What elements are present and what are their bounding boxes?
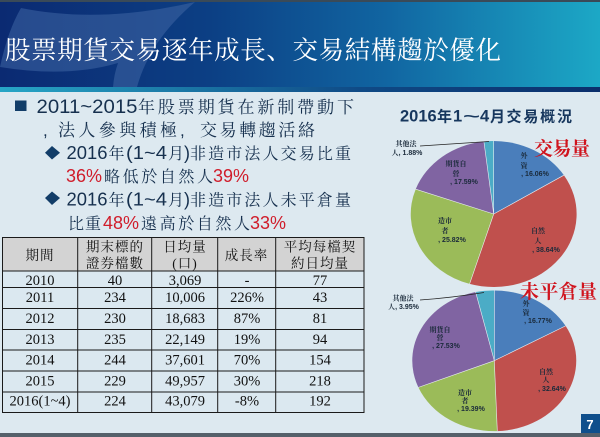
table rows: 18,683 (165, 311, 205, 327)
pie chart: open interest: 造市 (458, 388, 472, 397)
table rows: 2012 (26, 311, 54, 327)
icon: diamond bullet (45, 192, 60, 205)
bullet list (15, 97, 354, 233)
pie chart: trading volume: 人 (534, 237, 542, 245)
pie chart: trading volume: 外 (520, 151, 528, 160)
pie chart: open interest: 期貨自 (430, 325, 450, 334)
table rows: 49,957 (165, 374, 205, 390)
table rows (9, 273, 332, 410)
table rows: 77 (313, 273, 327, 289)
pie chart: trading volume: , 38.64% (532, 247, 561, 254)
sub bullet: open interest share: 2016 (66, 190, 108, 210)
table rows: - (245, 273, 250, 289)
pie chart: open interest: 自然 (539, 367, 554, 376)
footer bar (0, 433, 600, 437)
pie chart: open interest: 外 (522, 299, 530, 308)
chart title: 4 (480, 108, 490, 126)
pie chart: open interest: 者 (462, 396, 468, 405)
pie chart: trading volume: 人, 1.88% (392, 149, 423, 157)
chart title: 1 (453, 108, 462, 126)
sub bullet: open interest share: 48% (103, 212, 139, 233)
chart title (400, 108, 572, 126)
pie chart: open interest: 其他法 (392, 294, 414, 302)
pie chart: open interest: , 27.53% (432, 343, 461, 350)
sub bullet: open interest share: 年 (108, 190, 125, 210)
pie chart: trading volume (392, 139, 577, 287)
table rows: 235 (104, 332, 126, 348)
table rows: 2014 (26, 352, 55, 368)
table rows: 94 (313, 332, 328, 348)
pie chart: open interest: 人 (542, 376, 550, 384)
table rows: 43,079 (165, 394, 205, 410)
sub bullet: open interest share: 比重 (68, 215, 101, 233)
pie chart: trading volume: , 25.82% (438, 237, 467, 244)
pie chart: trading volume: 其他法 (396, 139, 417, 148)
chart title: 年 (437, 108, 452, 126)
table rows: 229 (104, 374, 126, 390)
page number (581, 414, 600, 433)
sub bullet: trading share: 2016 (66, 143, 108, 163)
table rows: 30% (234, 374, 260, 390)
table rows: 230 (104, 311, 126, 327)
table header: 期末標的 (86, 238, 144, 254)
table rows: 22,149 (165, 332, 205, 348)
label: open interest: 未平倉量 (520, 280, 597, 303)
table rows: 19% (234, 332, 260, 348)
sub bullet: trading share: 非造市法人交易比重 (190, 145, 351, 163)
table rows: 154 (309, 352, 332, 368)
table rows: 37,601 (165, 352, 205, 368)
sub bullet: open interest share (66, 190, 351, 233)
table header: 平均每檔契 (284, 238, 356, 254)
sub bullet: open interest share: 月 (168, 192, 184, 210)
icon: diamond bullet (45, 146, 60, 160)
sub bullet: open interest share: 非造市法人未平倉量 (190, 192, 351, 210)
table rows: 2011 (26, 290, 54, 306)
sub bullet: trading share (66, 143, 351, 186)
chart title: 2016 (400, 108, 437, 126)
sub bullet: trading share: 月 (168, 145, 184, 163)
pie chart: trading volume: , 16.06% (521, 171, 550, 178)
table rows: -8% (235, 394, 259, 410)
table rows: 218 (309, 374, 331, 390)
table header: 約日均量 (291, 256, 349, 271)
bullet text: main point: 年股票期貨在新制帶動下 (138, 97, 354, 117)
header banner (0, 0, 600, 92)
icon: square bullet (15, 100, 26, 111)
chart title: ~ (463, 108, 480, 126)
sub bullet: open interest share: ) (184, 190, 190, 210)
table rows: 234 (104, 290, 127, 306)
table rows: 2016(1~4) (9, 394, 71, 410)
data table (2, 237, 364, 412)
table header: 期間 (26, 248, 54, 263)
title: 股票期貨交易逐年成長、交易結構趨於優化 (5, 36, 501, 65)
table rows: 226% (230, 290, 264, 306)
table header: 成長率 (225, 247, 268, 263)
bullet text: main point: 2011~2015 (36, 97, 138, 118)
pie chart: trading volume: 者 (442, 226, 448, 235)
table rows: 81 (313, 311, 327, 327)
sub bullet: open interest share: 遠高於自然人 (141, 214, 250, 233)
sub bullet: trading share: ) (184, 143, 190, 163)
pie chart: trading volume: , 17.59% (450, 179, 479, 186)
bullet text: main point: , (43, 121, 48, 140)
pie chart: trading volume: 營 (452, 169, 460, 178)
sub bullet: open interest share: (1~4 (126, 190, 167, 210)
table rows: 192 (309, 394, 331, 410)
table rows: 87% (234, 311, 260, 327)
sub bullet: trading share: (1~4 (126, 143, 167, 163)
bullet text: main point (36, 97, 354, 140)
pie chart: trading volume: 自然 (531, 226, 546, 235)
chart title: 交易概況 (506, 108, 572, 126)
pie chart: open interest: 營 (436, 333, 444, 342)
pie chart: open interest: , 19.39% (457, 406, 486, 413)
bullet text: main point: , (180, 121, 185, 140)
page number: 7 (586, 417, 594, 432)
sub bullet: trading share: 年 (108, 144, 125, 163)
table header (26, 238, 356, 271)
table rows: 2015 (26, 374, 54, 390)
bullet text: main point: 法人參與積極 (58, 120, 177, 140)
sub bullet: trading share: 39% (213, 165, 249, 186)
pie chart: open interest: 人, 3.95% (388, 303, 420, 311)
label: trading volume: 交易量 (534, 138, 590, 160)
pie chart: open interest (388, 290, 576, 431)
table rows: 2010 (26, 273, 54, 289)
table rows: 244 (104, 352, 127, 368)
table rows: 10,006 (165, 290, 205, 306)
chart title: 月 (490, 108, 505, 126)
table rows: 2013 (26, 332, 54, 348)
table header: 證券檔數 (86, 255, 144, 271)
table rows: 224 (104, 394, 127, 410)
pie chart: trading volume: 資 (520, 161, 528, 170)
table rows: 40 (108, 273, 122, 289)
pie chart: trading volume: 期貨自 (446, 159, 466, 168)
pie chart: open interest: 資 (522, 308, 530, 317)
table rows: 70% (234, 352, 260, 368)
table header: (口) (172, 256, 198, 271)
pie chart: open interest: , 16.77% (524, 318, 553, 325)
table rows: 3,069 (169, 273, 201, 289)
table rows: 43 (313, 290, 327, 306)
pie chart: trading volume: 造市 (438, 216, 452, 225)
pie chart: open interest: , 32.64% (538, 386, 567, 393)
sub bullet: trading share: 略低於自然人 (104, 168, 213, 186)
bullet text: main point: 交易轉趨活絡 (200, 121, 315, 140)
sub bullet: trading share: 36% (66, 165, 102, 186)
table header: 日均量 (163, 240, 207, 254)
sub bullet: open interest share: 33% (250, 212, 286, 233)
